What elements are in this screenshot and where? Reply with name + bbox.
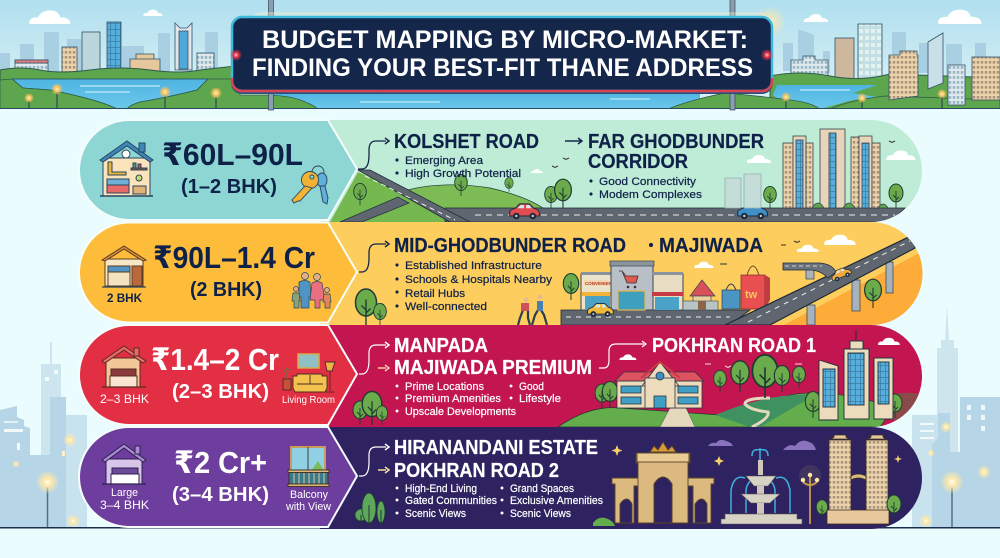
icon: balcony — [288, 447, 329, 486]
location text: row 3: Good — [519, 381, 544, 393]
flyover — [725, 234, 915, 325]
street lamp: right — [940, 470, 964, 527]
location text: row 3: Premium Amenities — [405, 393, 501, 405]
location text: row 4: Scenic Views — [510, 508, 571, 520]
location text: row 1: Modem Complexes — [599, 189, 703, 201]
left towers — [15, 22, 214, 73]
arrows: row 4 — [359, 444, 389, 476]
budget text: row 4: Balcony — [290, 489, 328, 501]
lake — [12, 79, 208, 109]
location text: row 2: Well-connected — [405, 301, 487, 313]
location text: row 2: Retail Hubs — [405, 288, 466, 300]
budget text: row 3: Living Room — [282, 394, 335, 406]
panel: row 4 locations — [320, 427, 922, 529]
budget text: row 4: 3–4 BHK — [100, 498, 149, 512]
title text — [252, 26, 753, 82]
budget text: row 2: (2 BHK) — [190, 279, 262, 301]
right towers — [791, 24, 882, 79]
panel: row 1 locations — [320, 120, 922, 222]
budget text: row 3: (2–3 BHK) — [172, 381, 269, 403]
background skyline: right — [912, 305, 1000, 528]
right foreground towers — [889, 33, 1000, 105]
hills and trees — [353, 338, 925, 427]
icon: living room — [283, 354, 335, 392]
budget text: row 4: ₹2 Cr+ — [174, 445, 267, 480]
location text: row 4: Scenic Views — [405, 508, 466, 520]
orange backdrop — [784, 250, 925, 325]
title text: FINDING YOUR BEST-FIT THANE ADDRESS — [252, 54, 753, 82]
clouds — [29, 10, 982, 24]
budget text: row 4: (3–4 BHK) — [172, 484, 269, 506]
ground line — [0, 527, 1000, 528]
location text: row 2: MAJIWADA — [659, 235, 763, 257]
street and shopping scene: tw — [745, 289, 758, 301]
icon: house row 3 — [102, 346, 146, 387]
budget chevron: row 4 — [79, 427, 357, 527]
budget text: row 3 — [100, 342, 335, 406]
gate arch — [612, 442, 714, 523]
twin towers — [816, 435, 901, 524]
budget text: row 1 — [162, 137, 303, 198]
location text: row 3: Upscale Developments — [405, 406, 516, 418]
location text: row 4: Grand Spaces — [510, 483, 574, 495]
budget text: row 2: ₹90L–1.4 Cr — [153, 240, 315, 275]
icon: house row 1 — [100, 141, 153, 196]
budget text: row 4 — [100, 445, 331, 513]
location text: row 4: Exclusive Amenities — [510, 495, 603, 507]
header scene: skyline and lake — [0, 0, 1000, 109]
location text: row 3: MAJIWADA PREMIUM — [394, 357, 592, 379]
budget text: row 4: with View — [285, 501, 331, 513]
budget text: row 2: 2 BHK — [107, 291, 142, 305]
location text: row 3: Lifestyle — [519, 393, 561, 405]
icon: keys — [292, 166, 328, 204]
street and shopping scene — [356, 235, 856, 325]
budget text: row 4: Large — [111, 487, 138, 499]
location text: row 2: MID-GHODBUNDER ROAD — [394, 235, 626, 257]
location text: row 3 — [394, 335, 816, 418]
icon: family — [292, 272, 331, 308]
arrows: row 3 — [359, 341, 646, 374]
arrow: row 2 — [359, 241, 389, 272]
panel: row 2 locations — [320, 222, 925, 325]
street and shopping scene: CONVENIENTS — [585, 281, 618, 286]
location text: row 3: POKHRAN ROAD 1 — [652, 335, 816, 357]
location text: row 1: CORRIDOR — [588, 151, 689, 173]
budget chevron: row 3 — [79, 325, 357, 425]
campus building — [615, 362, 704, 408]
location text: row 1: Good Connectivity — [599, 176, 697, 188]
arrows: row 1 — [358, 138, 582, 169]
location text: row 3: MANPADA — [394, 335, 488, 357]
hills — [0, 79, 117, 109]
budget text: row 3: ₹1.4–2 Cr — [151, 342, 279, 377]
location text: row 2: Schools & Hospitals Nearby — [405, 274, 553, 286]
location text: row 4: High-End Living — [405, 483, 477, 495]
sign poles — [268, 0, 735, 110]
budget chevron: row 2 — [79, 222, 357, 322]
location text: row 4: Gated Communities — [405, 495, 497, 507]
location text: row 4: HIRANANDANI ESTATE — [394, 437, 598, 459]
fountain — [721, 448, 802, 524]
budget text: row 1: ₹60L–90L — [162, 137, 303, 172]
budget text: row 1: (1–2 BHK) — [181, 176, 277, 198]
distant towers — [0, 29, 986, 80]
title sign — [230, 6, 786, 94]
budget text: row 2 — [107, 240, 315, 305]
icon: house row 4 — [102, 444, 146, 484]
title text: BUDGET MAPPING BY MICRO-MARKET: — [262, 26, 748, 54]
budget chevron: row 1 — [79, 120, 357, 220]
road scene — [330, 141, 915, 222]
location text: row 1: FAR GHODBUNDER — [588, 131, 765, 153]
glass towers — [819, 330, 893, 420]
trees and clouds — [355, 440, 902, 527]
location text: row 4: POKHRAN ROAD 2 — [394, 460, 559, 482]
location text: row 1: KOLSHET ROAD — [394, 131, 539, 153]
location text: row 2: Established Infrastructure — [405, 260, 542, 272]
location text: row 2 — [394, 235, 763, 313]
location text: row 1: High Growth Potential — [405, 168, 521, 180]
tall apartment towers — [725, 129, 888, 208]
land strip — [0, 66, 231, 80]
street lamp: left — [36, 470, 60, 527]
location text: row 3: Prime Locations — [405, 381, 484, 393]
panel: row 3 locations — [320, 325, 925, 427]
location text: row 1 — [394, 131, 765, 201]
icon: house row 2 — [102, 246, 146, 287]
header lamps — [29, 92, 942, 109]
lamp post — [799, 465, 821, 524]
location text: row 1: Emerging Area — [405, 155, 484, 167]
budget text: row 3: 2–3 BHK — [100, 392, 149, 406]
location text: row 4 — [394, 437, 603, 520]
background skyline: left — [0, 342, 87, 528]
